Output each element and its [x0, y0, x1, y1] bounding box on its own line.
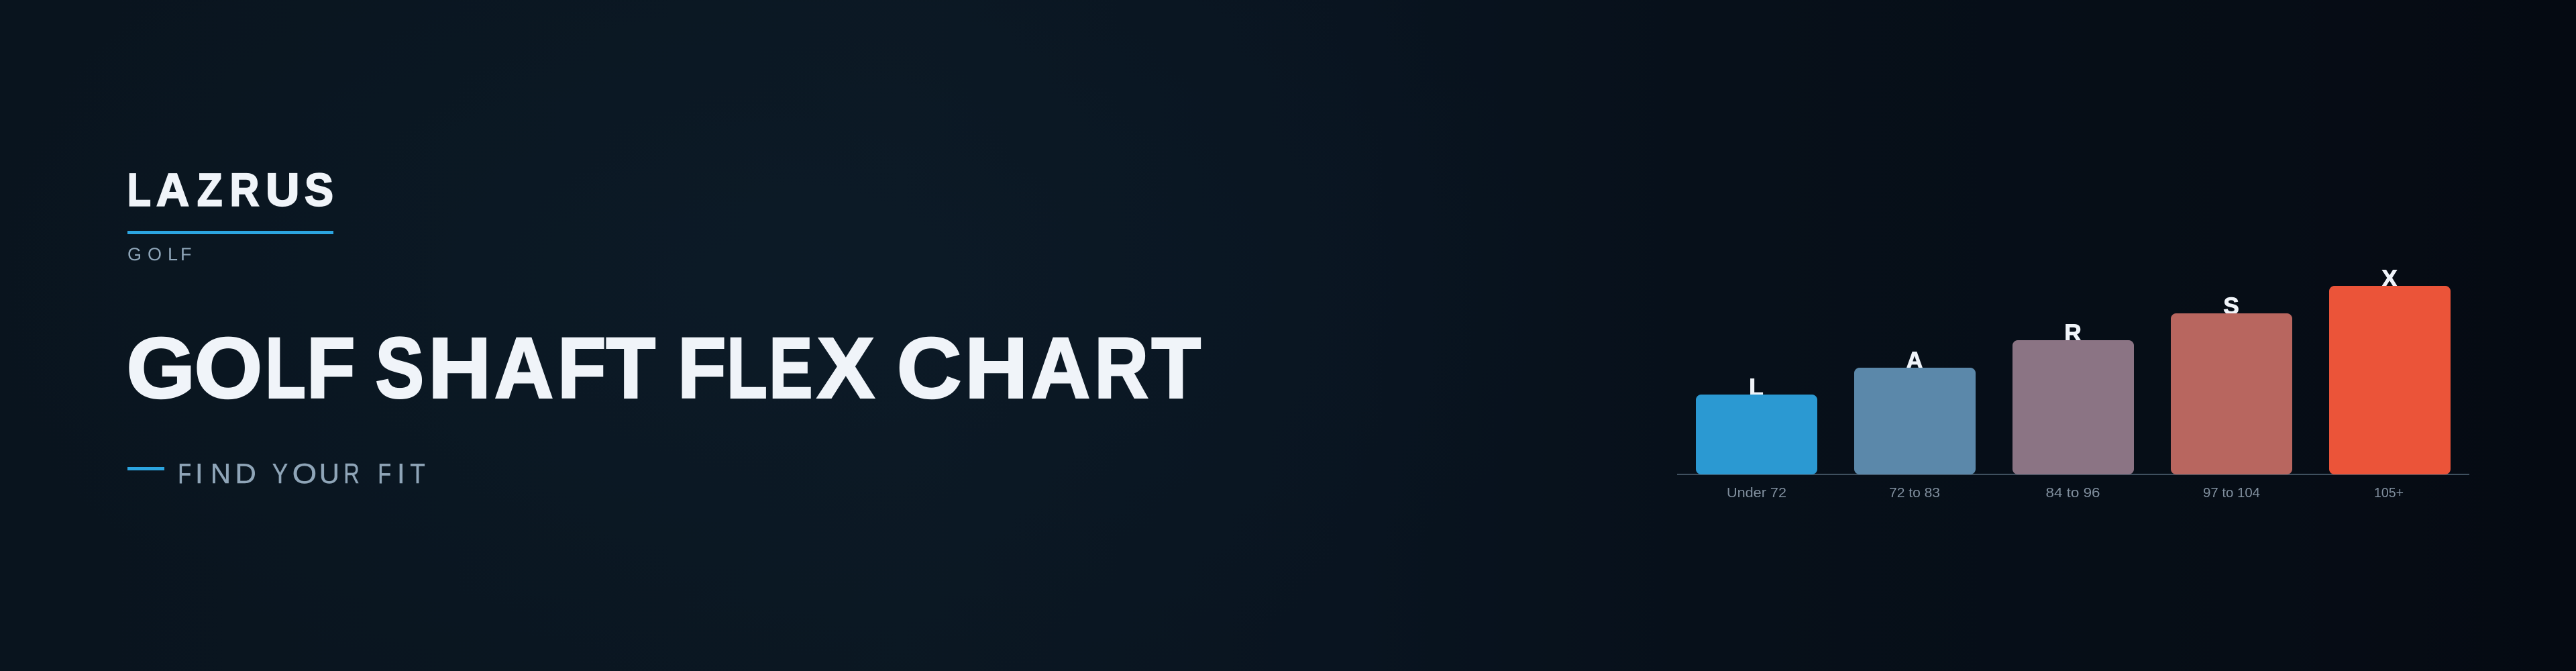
- tagline text: U: [319, 458, 339, 489]
- chart axis: [1677, 474, 2469, 475]
- bar L: L: [1749, 374, 1764, 401]
- logo wordmark: S: [305, 164, 333, 216]
- tagline text: N: [211, 458, 231, 489]
- bar S: S: [2223, 293, 2239, 319]
- title: T: [1151, 321, 1201, 416]
- logo underline: [127, 231, 333, 234]
- tagline text: O: [292, 458, 317, 489]
- title: L: [727, 321, 767, 416]
- logo wordmark: L: [127, 164, 151, 216]
- title: H: [965, 321, 1028, 416]
- bar S: [2171, 293, 2292, 501]
- title: T: [606, 321, 655, 416]
- tagline text: T: [410, 458, 425, 489]
- logo block: [127, 164, 333, 264]
- title: O: [195, 321, 262, 416]
- title: F: [557, 321, 606, 416]
- logo wordmark: Z: [197, 164, 223, 216]
- tagline text: Y: [272, 458, 288, 489]
- logo subtitle: GOLF: [127, 244, 192, 264]
- title: G: [126, 321, 195, 416]
- title: A: [1031, 321, 1090, 416]
- title: X: [817, 321, 875, 416]
- bar A: 72 to 83: [1889, 486, 1940, 501]
- title: F: [678, 321, 726, 416]
- title: F: [307, 321, 356, 416]
- bar R: 84 to 96: [2046, 486, 2100, 501]
- tagline: [127, 458, 425, 489]
- tagline text: I: [397, 458, 405, 489]
- tagline text: I: [195, 458, 203, 489]
- bar X: X: [2381, 266, 2398, 292]
- title: A: [494, 321, 553, 416]
- bar chart: [1677, 266, 2469, 501]
- title: R: [1094, 321, 1148, 416]
- bar S: 97 to 104: [2203, 486, 2260, 501]
- bar X: 105+: [2374, 486, 2404, 501]
- title: L: [265, 321, 306, 416]
- title: E: [769, 321, 812, 416]
- bar A: A: [1906, 348, 1923, 374]
- logo wordmark: A: [156, 164, 189, 216]
- tagline text: F: [178, 458, 191, 489]
- tagline text: R: [343, 458, 360, 489]
- logo wordmark: U: [266, 164, 299, 216]
- bar L: [1696, 374, 1817, 501]
- title: S: [376, 321, 424, 416]
- logo wordmark: R: [229, 164, 259, 216]
- bar X: [2329, 266, 2451, 501]
- tagline dash: [127, 467, 164, 470]
- tagline text: F: [378, 458, 391, 489]
- title: H: [428, 321, 491, 416]
- title: C: [897, 321, 961, 416]
- bar R: R: [2064, 320, 2082, 346]
- tagline text: D: [235, 458, 256, 489]
- bar L: Under 72: [1727, 486, 1786, 501]
- bar A: [1854, 348, 1976, 501]
- bar R: [2012, 320, 2134, 501]
